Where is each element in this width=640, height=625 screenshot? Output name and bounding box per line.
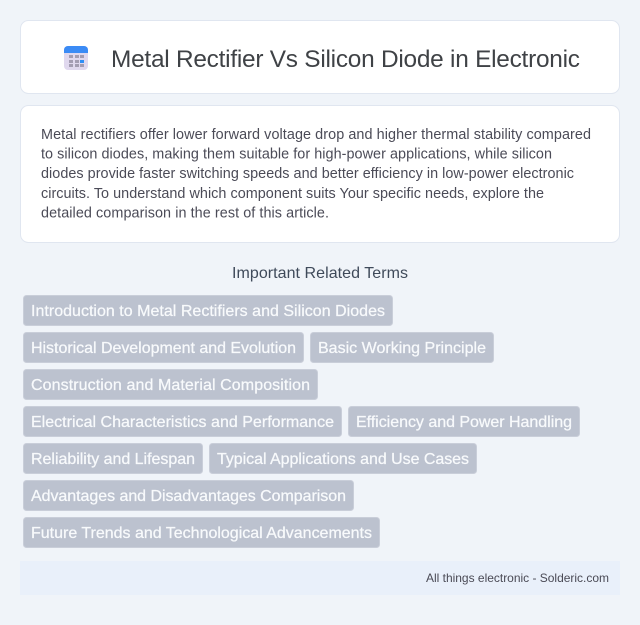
tag: efficiency	[348, 406, 580, 436]
heading: important related terms: Important Related Terms	[232, 265, 408, 282]
tag: basic working principle: Basic Working Principle	[318, 340, 486, 357]
tag: introduction	[24, 296, 392, 326]
text block: description: detailed comparison in the rest of this article.	[41, 205, 329, 221]
tag: advantages	[24, 480, 354, 510]
tag: electrical characteristics: Electrical Characteristics and Performance	[31, 414, 334, 431]
text block: description: circuits. To understand which component suits Your specific needs, explore the	[41, 186, 544, 202]
text block: description: Metal rectifiers offer lower forward voltage drop and higher thermal stability compared	[41, 127, 591, 143]
text block: description	[41, 127, 591, 221]
text block: description: to silicon diodes, making them suitable for high-power applications, while silicon	[41, 147, 552, 163]
title: Metal Rectifier Vs Silicon Diode in Electronic	[111, 46, 580, 73]
panel: description	[20, 106, 620, 242]
tag list: related terms	[24, 296, 580, 548]
tag: electrical characteristics	[24, 406, 342, 436]
tag: reliability	[24, 444, 202, 474]
tag: historical development	[24, 332, 304, 362]
tag: advantages: Advantages and Disadvantages Comparison	[31, 488, 346, 505]
tag: typical applications	[210, 444, 476, 474]
tag: future trends	[24, 518, 380, 548]
panel: title header	[20, 20, 620, 94]
text block: description: diodes provide faster switching speeds and better efficiency in low-power electronic	[41, 166, 574, 182]
tag: construction	[24, 370, 318, 400]
tag: future trends: Future Trends and Technological Advancements	[31, 525, 372, 542]
tag: historical development: Historical Development and Evolution	[31, 340, 296, 357]
tag: reliability: Reliability and Lifespan	[31, 451, 195, 468]
tag: typical applications: Typical Applications and Use Cases	[217, 451, 469, 468]
tag: basic working principle	[310, 332, 494, 362]
tag: construction: Construction and Material Composition	[31, 377, 310, 394]
footer	[20, 561, 620, 595]
tag: efficiency: Efficiency and Power Handling	[356, 414, 572, 431]
footer: All things electronic - Solderic.com	[426, 571, 609, 585]
icon: calendar	[64, 46, 88, 70]
tag: introduction: Introduction to Metal Rectifiers and Silicon Diodes	[31, 303, 385, 320]
